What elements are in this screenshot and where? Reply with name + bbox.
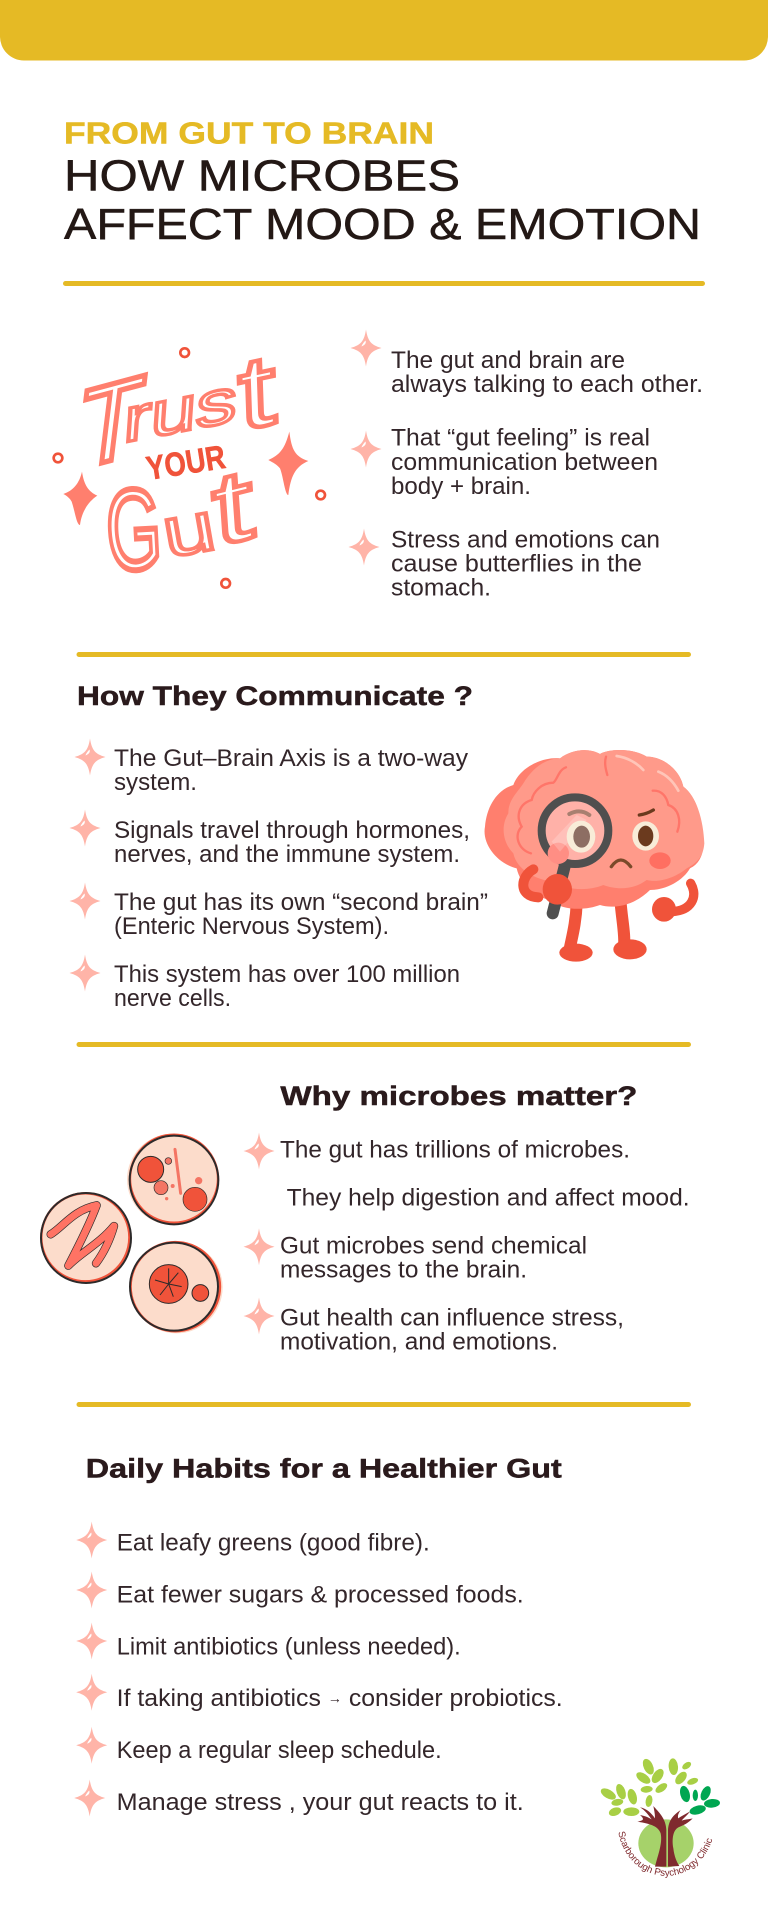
bullet: gut health influence: motivation, and emotions. <box>280 1329 558 1356</box>
illustration: Trust Your Gut lettering <box>54 332 325 596</box>
bullet: nerve cells: This system has over 100 million <box>114 961 460 988</box>
bullet: signals: Signals travel through hormones, <box>114 817 470 844</box>
bullet: nerve cells: nerve cells. <box>114 985 231 1012</box>
bullet: chemical messages <box>244 1228 587 1284</box>
lettering: Trust: T <box>72 350 151 495</box>
bullet: gut and brain talk <box>350 330 703 398</box>
bullet: gut feeling: That “gut feeling” is real <box>391 425 650 452</box>
bullet: leafy greens <box>76 1522 430 1558</box>
title block <box>64 117 701 249</box>
lettering: Gut: u <box>156 486 221 572</box>
bullet: second brain: (Enteric Nervous System). <box>114 913 389 940</box>
panel: why microbes matter <box>41 1081 690 1356</box>
petri dish top <box>127 1134 218 1225</box>
panel: trust your gut intro <box>54 330 703 602</box>
main title: HOW MICROBES <box>64 153 460 201</box>
lettering: Trust: rus <box>122 364 240 457</box>
lettering: your: YOUR <box>144 439 228 488</box>
petri dish bottom <box>130 1241 223 1333</box>
icon: large sparkle <box>268 432 308 495</box>
panel: how they communicate <box>70 681 704 1012</box>
logo clinic name: Scarborough Psychology Clinic <box>618 1832 712 1878</box>
brain right arm <box>652 883 694 922</box>
bullet: signals: nerves, and the immune system. <box>114 841 460 868</box>
logo tree <box>637 1806 693 1867</box>
lettering: Gut: G <box>103 465 165 596</box>
bullet: manage stress <box>74 1780 524 1816</box>
bullet: sleep schedule <box>76 1727 442 1764</box>
bullet: probiotics <box>76 1674 563 1712</box>
brain body <box>485 750 704 909</box>
bullet: limit antibiotics: Limit antibiotics (unless needed). <box>117 1633 461 1660</box>
main title: AFFECT MOOD & EMOTION <box>64 201 701 249</box>
main title <box>64 153 701 249</box>
lettering: Gut: t <box>209 446 257 569</box>
bullet: gut and brain talk: The gut and brain are <box>391 347 625 374</box>
bullet: stress and butterflies: Stress and emotions can <box>391 526 660 553</box>
icon: decorative rings <box>54 348 325 588</box>
bullet: second brain: The gut has its own “second brain” <box>114 889 488 916</box>
bullet: trillions of microbes: The gut has trillions of microbes. <box>280 1137 630 1164</box>
bullet: second brain <box>70 882 488 940</box>
bullet: probiotics: → <box>328 1690 342 1706</box>
logo circle <box>638 1819 694 1867</box>
eyebrow heading: FROM GUT TO BRAIN <box>64 117 434 151</box>
bullet: gut and brain talk: always talking to each other. <box>391 371 703 398</box>
logo dark leaves <box>678 1785 720 1816</box>
bullet: two-way system <box>74 738 469 796</box>
icon: small sparkle <box>63 472 97 525</box>
heading: how they communicate: How They Communicate ? <box>77 681 473 711</box>
brain face <box>611 810 671 869</box>
bullet: stress and butterflies: stomach. <box>391 574 491 602</box>
logo light leaves <box>599 1757 699 1818</box>
bullet: nerve cells <box>70 954 460 1012</box>
top banner <box>0 0 768 61</box>
bullet: gut feeling: communication between <box>391 449 658 476</box>
bullet: probiotics: consider probiotics. <box>342 1685 563 1712</box>
panel: daily habits <box>74 1453 563 1816</box>
lettering: Gut <box>103 446 257 596</box>
petri dish left <box>41 1192 131 1283</box>
bullet: fewer sugars: Eat fewer sugars & processed foods. <box>117 1581 524 1608</box>
bullet: manage stress: Manage stress , your gut reacts to it. <box>117 1789 524 1816</box>
brain legs <box>559 903 647 962</box>
logo: Scarborough Psychology Clinic <box>600 1758 720 1878</box>
bullet: gut health influence <box>244 1298 624 1356</box>
heading: daily habits: Daily Habits for a Healthier Gut <box>86 1453 562 1483</box>
bullet: stress and butterflies: cause butterflies in the <box>391 550 642 577</box>
bullet: chemical messages: messages to the brain. <box>280 1257 527 1284</box>
bullet: leafy greens: Eat leafy greens (good fibre). <box>117 1530 430 1557</box>
lettering: Trust: t <box>236 332 278 453</box>
brain left arm and hand <box>523 869 572 905</box>
bullet: signals <box>70 810 470 868</box>
illustration: petri dishes <box>41 1134 223 1333</box>
bullet: fewer sugars <box>76 1572 524 1608</box>
lettering: Trust <box>72 332 278 495</box>
bullet: gut feeling <box>350 425 658 500</box>
bullet: two-way system: The Gut–Brain Axis is a two-way <box>114 745 469 772</box>
bullet: limit antibiotics <box>76 1622 461 1660</box>
bullet: trillions of microbes <box>244 1132 630 1170</box>
heading: why microbes matter: Why microbes matter? <box>280 1081 637 1111</box>
text: digestion and mood: They help digestion and affect mood. <box>287 1185 690 1212</box>
bullet: gut health influence: Gut health can influence stress, <box>280 1305 624 1332</box>
bullet: sleep schedule: Keep a regular sleep schedule. <box>117 1737 442 1764</box>
bullet: chemical messages: Gut microbes send chemical <box>280 1233 587 1260</box>
magnifying glass <box>542 797 608 913</box>
bullet: probiotics: If taking antibiotics <box>117 1685 318 1712</box>
bullet: stress and butterflies <box>348 526 660 602</box>
bullet: two-way system: system. <box>114 769 197 796</box>
bullet: gut feeling: body + brain. <box>391 473 531 500</box>
illustration: brain with magnifying glass <box>485 750 704 962</box>
